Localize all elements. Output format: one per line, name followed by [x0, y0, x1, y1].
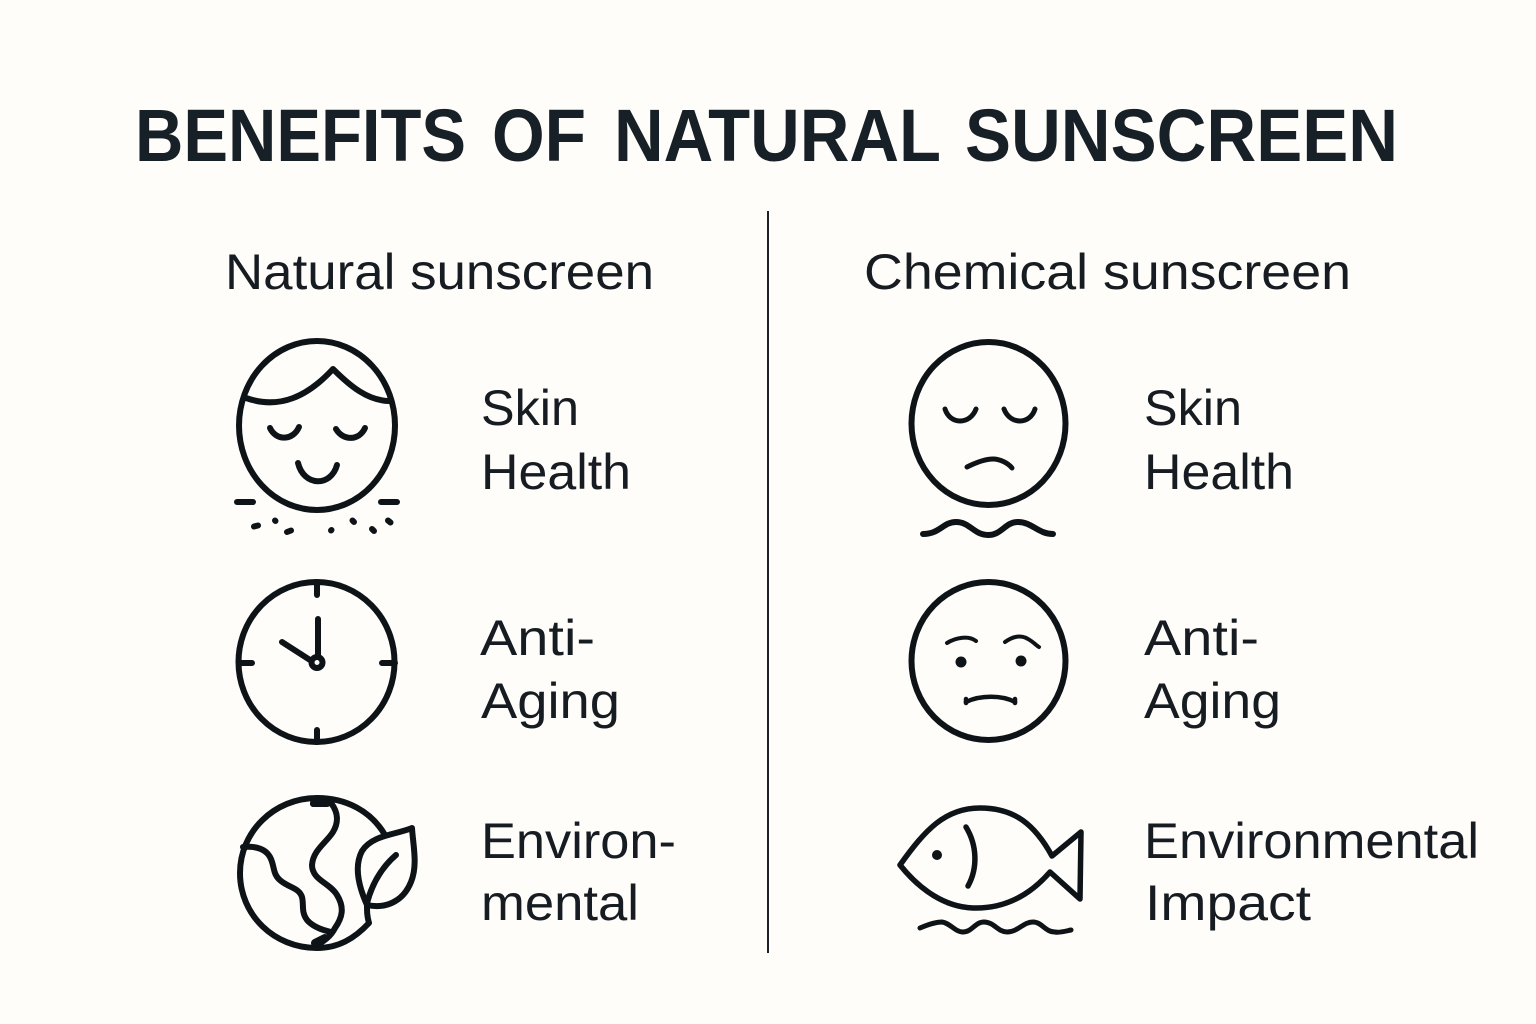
icon: happy face with hair	[237, 341, 397, 532]
label: chemical anti-aging line two: Aging	[1144, 673, 1281, 729]
title: BENEFITS	[135, 94, 466, 177]
label: natural environmental: Environ-	[481, 813, 676, 869]
icon: clock	[238, 582, 395, 742]
label: natural anti-aging line two: Aging	[481, 673, 620, 729]
icon: worried face	[912, 582, 1066, 740]
title	[135, 94, 1398, 177]
label: natural skin health line two: Health	[481, 444, 631, 500]
icon: fish with wave	[900, 808, 1081, 932]
label: chemical skin health: Skin	[1144, 380, 1242, 436]
label: natural anti-aging: Anti-	[480, 610, 595, 666]
icon: sad face with wave	[912, 342, 1066, 535]
icon: globe with leaf	[240, 798, 415, 948]
title: OF	[492, 94, 586, 177]
heading: chemical sunscreen: Chemical sunscreen	[864, 244, 1351, 300]
label: natural skin health: Skin	[481, 380, 579, 436]
heading: natural sunscreen: Natural sunscreen	[225, 244, 654, 300]
label: chemical environmental impact line two: Impact	[1145, 875, 1311, 931]
label: chemical anti-aging: Anti-	[1144, 610, 1259, 666]
title: SUNSCREEN	[965, 94, 1398, 177]
title: NATURAL	[614, 94, 941, 177]
label: natural environmental line two: mental	[481, 875, 639, 931]
label: chemical skin health line two: Health	[1144, 444, 1294, 500]
label: chemical environmental impact: Environmental	[1144, 813, 1479, 869]
